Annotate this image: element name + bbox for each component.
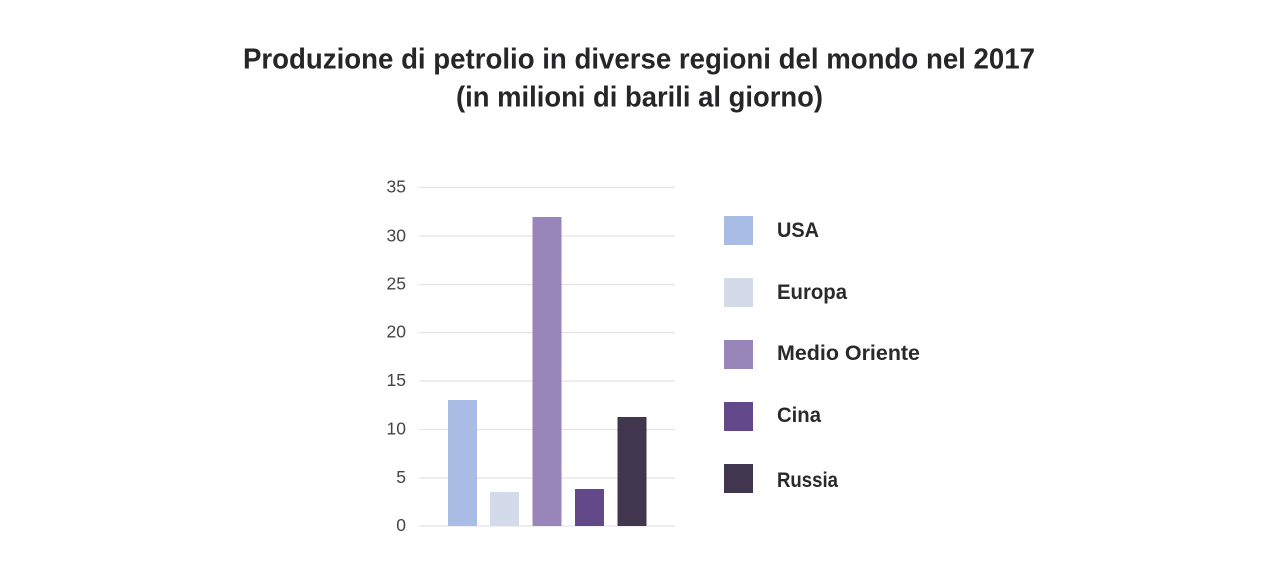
legend — [724, 216, 920, 493]
y axis labels: 25 — [387, 274, 406, 294]
legend item: Medio Oriente — [724, 340, 920, 369]
legend item: Russia: Russia — [777, 469, 838, 492]
title: Produzione di petrolio in diverse regioni del mondo nel 2017 — [243, 44, 1035, 76]
y axis labels: 30 — [387, 226, 406, 246]
legend item: Europa — [724, 278, 847, 307]
y axis labels: 20 — [387, 322, 406, 342]
legend item: Medio Oriente: Medio Oriente — [777, 342, 920, 365]
bar chart — [387, 176, 675, 535]
legend item: Russia — [724, 464, 838, 493]
bar: Cina — [575, 489, 604, 526]
y axis labels: 35 — [387, 176, 406, 196]
y axis labels: 15 — [387, 370, 406, 390]
legend item: Europa: Europa — [777, 281, 847, 304]
title: (in milioni di barili al giorno) — [456, 82, 823, 114]
title — [243, 44, 1035, 114]
y axis labels: 5 — [396, 467, 406, 487]
y axis labels — [387, 176, 406, 535]
y axis labels: 0 — [396, 515, 406, 535]
bar: Medio Oriente — [532, 217, 562, 526]
legend item: USA — [724, 216, 819, 245]
bar: USA — [448, 400, 477, 526]
bar: Europa — [490, 492, 519, 526]
legend item: Cina — [724, 402, 821, 431]
bar: Russia — [618, 417, 646, 526]
legend item: USA: USA — [777, 219, 819, 242]
y axis labels: 10 — [387, 418, 406, 438]
legend item: Cina: Cina — [777, 404, 821, 427]
gridlines — [419, 188, 675, 526]
